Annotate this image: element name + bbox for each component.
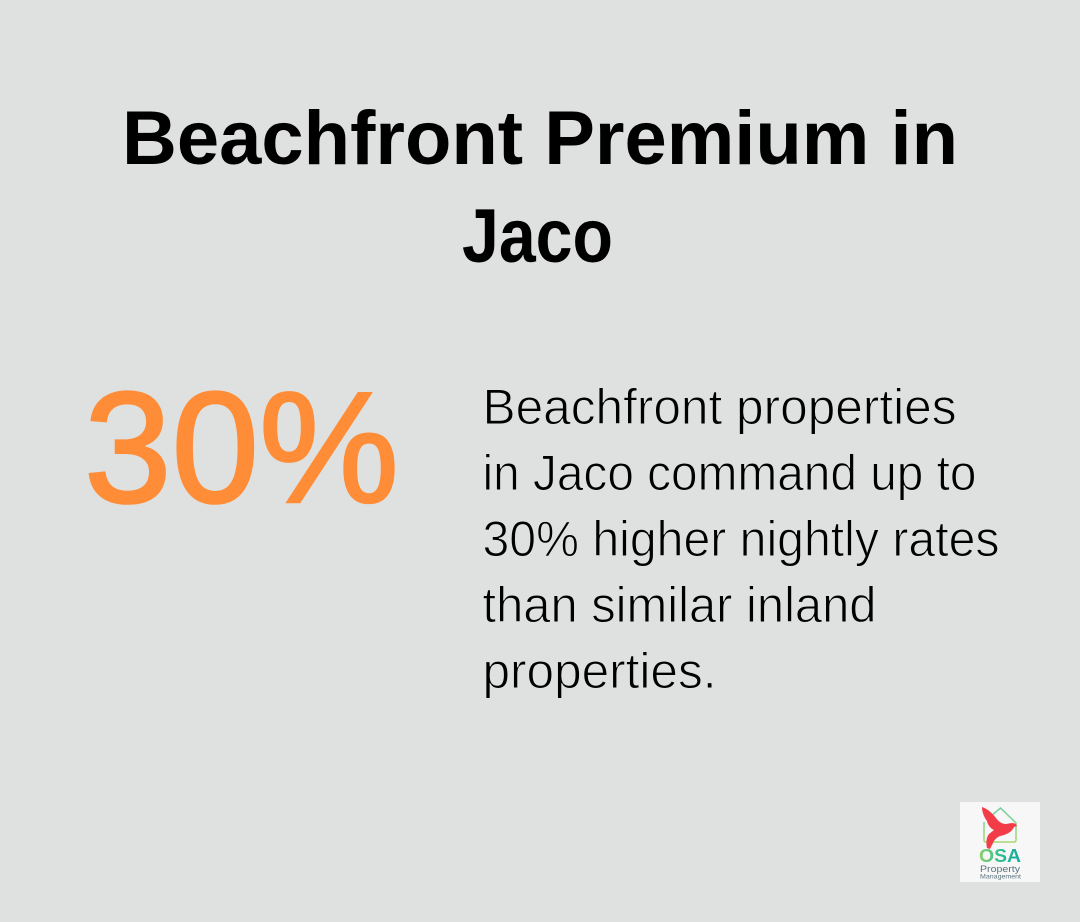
logo: OSA Property Management [960,802,1040,882]
description text [482,379,1000,699]
description text: than similar inland [482,577,876,633]
description text: Beachfront properties [482,379,956,435]
logo wordmark: OSA [979,846,1021,866]
title: Jaco [462,194,613,279]
description text: 30% higher nightly rates [482,511,1000,567]
title: Beachfront Premium in [122,96,958,181]
logo subtitle second line: Management [980,874,1021,880]
icon: red bird [982,807,1017,849]
logo background [960,802,1040,882]
logo subtitle: Property [980,864,1020,875]
description text: in Jaco command up to [482,445,976,501]
description text: properties. [482,643,716,699]
title [122,96,958,279]
big statistic: 30%: 30% [84,360,399,536]
icon: house outline [984,808,1016,842]
